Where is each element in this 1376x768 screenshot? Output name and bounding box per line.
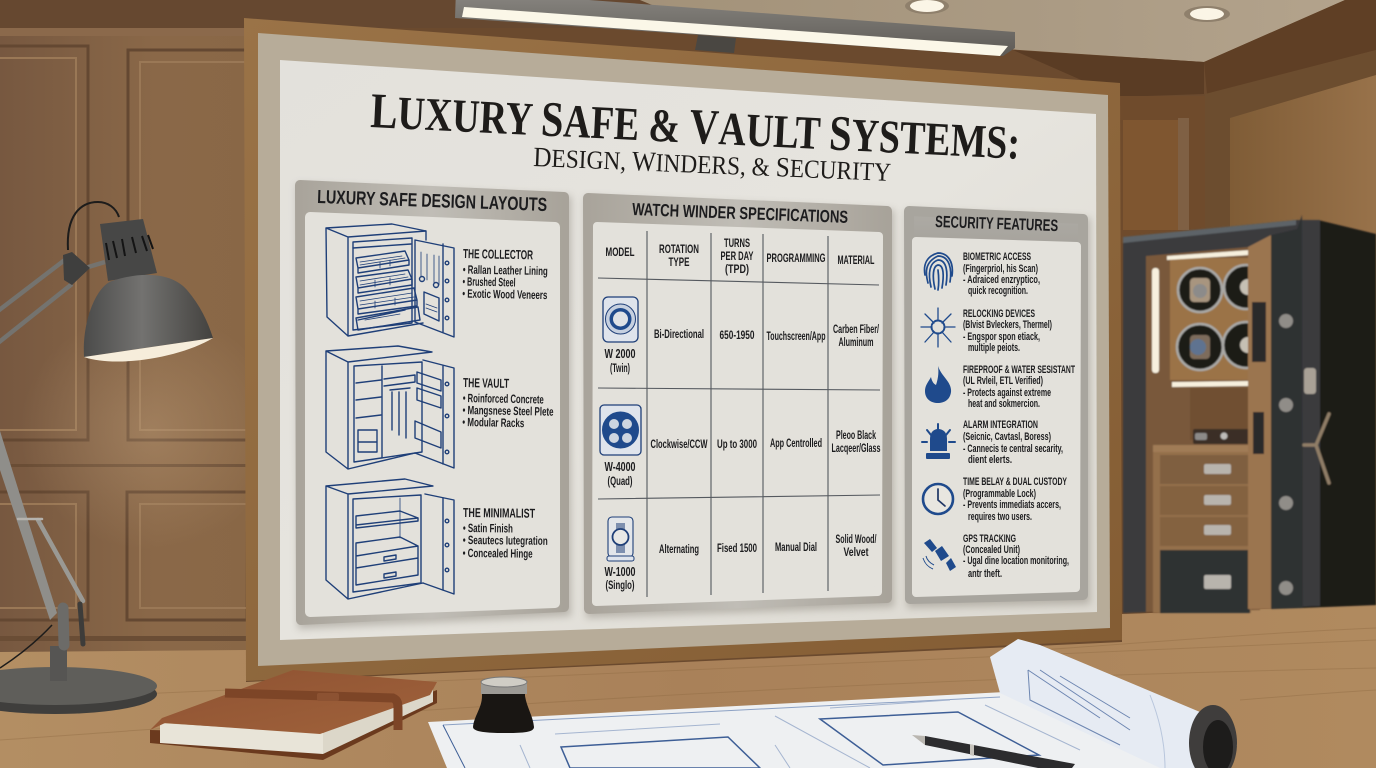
feature: relocking devices: (Blvist Bvleckers, Thermel): [963, 319, 1052, 331]
feature: biometric access: [925, 251, 1040, 297]
text: the collector: • Exotic Wood Veneers: [462, 286, 548, 302]
subtitle: DESIGN, WINDERS, & SECURITY: [533, 142, 892, 188]
light strips: [1152, 250, 1250, 387]
desk lamp: [0, 202, 213, 714]
pen: [912, 735, 1075, 768]
row: W-1000: Velvet: [844, 547, 869, 559]
lamp glow on wall: [20, 310, 280, 550]
feature: relocking devices: multiple peiots.: [968, 342, 1020, 354]
safe drawing: the collector: [326, 224, 454, 337]
text: the collector: • Brushed Steel: [462, 274, 516, 290]
heading: LUXURY SAFE DESIGN LAYOUTS: [317, 187, 547, 216]
heading: WATCH WINDER SPECIFICATIONS: [632, 199, 848, 227]
row: W-4000: Pleoo Black: [836, 430, 876, 442]
table header: (TPD): [725, 264, 749, 276]
panel: luxury safe design layouts: [297, 184, 571, 629]
text: the vault: • Mangsnese Steel Plete: [462, 403, 554, 419]
safe drawing: the vault: [326, 346, 454, 469]
row: W-1000: Fised 1500: [717, 543, 757, 555]
feature: fireproof and water resistant: - Protects against extreme: [963, 387, 1051, 399]
feature: time delay and dual custody: [923, 476, 1067, 523]
feature: alarm integration: [922, 419, 1063, 466]
panel: watch winder specifications: [585, 197, 894, 618]
row: W-2000: 650-1950: [720, 330, 754, 342]
wood frame: [244, 18, 1122, 681]
table header: MODEL: [606, 247, 634, 259]
leather notebook: [150, 670, 437, 760]
bulletin board: [244, 18, 1122, 681]
row: W-2000: Aluminum: [838, 337, 874, 349]
row: W-4000: Lacqeer/Glass: [832, 443, 880, 455]
back wall crown and panel: [1013, 50, 1205, 621]
text: the minimalist: • Concealed Hinge: [463, 546, 533, 561]
feature: alarm integration: - Cannecis te central secarity,: [963, 443, 1063, 455]
row: W-4000: W-4000: [604, 460, 636, 474]
feature: time delay and dual custody: - Prevents immediats accers,: [963, 499, 1061, 511]
icon: twin winder: [603, 297, 638, 342]
watch winders: [1177, 265, 1269, 370]
feature: biometric access: BIOMETRIC ACCESS: [963, 251, 1031, 263]
door handle: [1304, 414, 1329, 483]
feature: time delay and dual custody: requires two users.: [968, 511, 1032, 523]
poster sheet: [280, 60, 1097, 640]
drawers: [1153, 445, 1251, 613]
desk: [0, 605, 1376, 768]
lamp base: [0, 646, 157, 714]
row: W-1000: Solid Wood/: [836, 534, 877, 546]
icon: single winder: [607, 517, 634, 561]
row: W-1000: [604, 517, 877, 592]
feature: relocking devices: RELOCKING DEVICES: [963, 308, 1035, 320]
feature: fireproof and water resistant: (UL Rvleil, ETL Verified): [963, 375, 1043, 387]
safe door: [1248, 235, 1271, 609]
row: W-1000: W-1000: [604, 565, 636, 579]
table header: TURNS: [724, 238, 750, 250]
feature: gps tracking: antr theft.: [968, 568, 1002, 580]
heading: SECURITY FEATURES: [935, 213, 1058, 235]
feature: fireproof and water resistant: FIREPROOF & WATER SESISTANT: [963, 364, 1075, 376]
feature: time delay and dual custody: (Programmable Lock): [963, 488, 1036, 500]
text: the vault: THE VAULT: [463, 375, 509, 391]
ceiling downlights: [905, 0, 1230, 22]
feature: biometric access: - Adraiced enzryptico,: [963, 274, 1040, 286]
text: the minimalist: THE MINIMALIST: [463, 505, 535, 521]
table header: MATERIAL: [838, 255, 874, 267]
loupe: [473, 677, 534, 733]
tray: [1193, 429, 1249, 444]
text: the collector: • Rallan Leather Lining: [463, 262, 548, 278]
right wall crown and panel: [1204, 0, 1376, 620]
table header: PROGRAMMING: [766, 253, 826, 265]
feature: gps tracking: [923, 533, 1069, 580]
feature: biometric access: quick recognition.: [968, 285, 1028, 297]
row: W-1000: Manual Dial: [775, 542, 817, 554]
icon: flame: [925, 366, 951, 403]
top light bar: [455, 0, 1015, 56]
feature: fireproof and water resistant: heat and sokmercion.: [968, 398, 1040, 410]
row: W-2000: Carben Fiber/: [833, 324, 879, 336]
row: W-2000: Touchscreen/App: [766, 331, 826, 343]
feature: fireproof and water resistant: [925, 364, 1075, 410]
text: the minimalist: [463, 505, 548, 561]
row: W-1000: (Singlo): [606, 580, 635, 592]
row: W-4000: App Centrolled: [770, 438, 822, 450]
feature: biometric access: (Fingerpriol, his Scan): [963, 263, 1038, 275]
text: the collector: THE COLLECTOR: [463, 246, 534, 262]
ceiling: [640, 0, 1345, 62]
interior: [1146, 246, 1260, 612]
icon: clock: [923, 484, 953, 514]
lamp upper arm: [0, 259, 105, 343]
icon: quad winder: [600, 405, 641, 455]
row: W-2000: Bi-Directional: [654, 329, 704, 341]
feature: gps tracking: GPS TRACKING: [963, 533, 1016, 545]
safe drawing: the minimalist: [326, 479, 454, 599]
lamp lower arm: [0, 431, 83, 645]
lamp cable: [68, 202, 119, 250]
icon: blast star: [921, 308, 955, 347]
row: W-2000: W 2000: [604, 347, 636, 361]
blueprints: [428, 639, 1237, 768]
icon: alarm siren: [922, 424, 955, 459]
feature: gps tracking: - Ugal dine location monitoring,: [963, 555, 1069, 567]
feature: alarm integration: (Seicnic, Cavtasl, Boress): [963, 431, 1051, 443]
table grid: [598, 231, 880, 597]
icon: satellite: [923, 539, 956, 571]
rolled blueprint: [990, 639, 1237, 768]
lamp shade: [84, 219, 213, 362]
table header: PER DAY: [720, 251, 754, 263]
row: W-4000: [600, 405, 880, 488]
row: W-2000: (Twin): [610, 363, 630, 375]
safe body: [1300, 220, 1376, 608]
feature: time delay and dual custody: TIME BELAY & DUAL CUSTODY: [963, 476, 1067, 488]
text: the vault: • Roinforced Concrete: [463, 391, 544, 407]
table header: ROTATION: [659, 244, 699, 256]
text: the vault: [462, 375, 554, 431]
row: W-4000: Clockwise/CCW: [650, 439, 708, 451]
text: the collector: [462, 246, 548, 302]
panel: security features: [906, 210, 1090, 608]
feature: relocking devices: - Engspor spon etiack,: [963, 331, 1040, 343]
text: the minimalist: • Seautecs Iutegration: [463, 533, 548, 548]
text: the vault: • Modular Racks: [462, 415, 525, 430]
safe in background: [1123, 215, 1376, 613]
feature: alarm integration: dient elerts.: [968, 454, 1012, 466]
table header: [606, 238, 874, 276]
left wood wall: [0, 0, 700, 660]
row: W-4000: (Quad): [608, 476, 633, 488]
table header: TYPE: [668, 257, 690, 269]
feature: gps tracking: (Concealed Unit): [963, 544, 1020, 556]
row: W-2000: [603, 297, 879, 375]
row: W-1000: Alternating: [659, 544, 699, 556]
title: LUXURY SAFE & VAULT SYSTEMS:: [369, 82, 1021, 170]
icon: fingerprint: [925, 253, 952, 290]
text: the minimalist: • Satin Finish: [463, 521, 513, 536]
row: W-4000: Up to 3000: [717, 439, 757, 451]
feature: relocking devices: [921, 308, 1052, 354]
safe frame: [1123, 220, 1320, 613]
feature: alarm integration: ALARM INTEGRATION: [963, 419, 1038, 431]
